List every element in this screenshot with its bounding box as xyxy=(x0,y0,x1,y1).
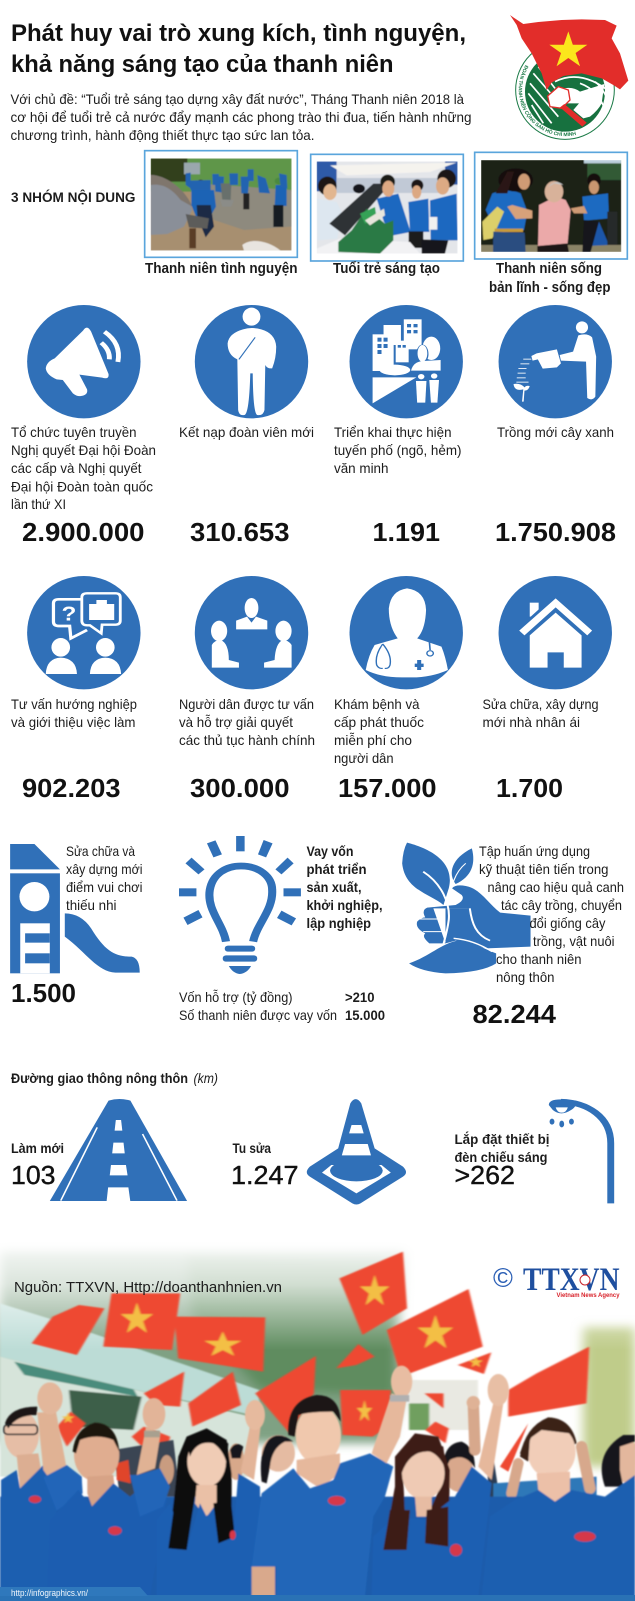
text: loans: Vay vốn xyxy=(306,843,354,859)
table: loan figures xyxy=(179,989,385,1023)
heading: rural roads: (km) xyxy=(194,1071,218,1086)
number: 1.750.908 xyxy=(495,517,616,547)
icon: watering a plant xyxy=(499,305,612,418)
back row and shade xyxy=(113,1440,180,1497)
icon: counselling chat: ? xyxy=(62,603,76,625)
number: 902.203 xyxy=(22,773,120,803)
stat: civilised streets xyxy=(334,305,463,547)
text: training: trồng, vật nuôi xyxy=(533,933,614,949)
text: new members: Kết nạp đoàn viên mới xyxy=(179,424,314,440)
number: 310.653 xyxy=(190,517,290,547)
text: loans: phát triển xyxy=(306,861,366,877)
table: loan figures: Số thanh niên được vay vốn xyxy=(179,1007,337,1023)
woman right xyxy=(520,1417,577,1460)
number: 300.000 xyxy=(190,773,290,803)
text: propaganda: Tổ chức tuyên truyền xyxy=(11,424,136,440)
text: propaganda: các cấp và Nghị quyết xyxy=(11,460,142,476)
caption: living boldly and beautifully: Thanh niên sống xyxy=(496,261,602,277)
text: loans xyxy=(306,843,382,931)
man centre left xyxy=(72,1435,120,1480)
text: streets: tuyến phố (ngõ, hẻm) xyxy=(334,442,462,458)
stat: repaired roads xyxy=(231,1099,406,1204)
stat: street lighting xyxy=(454,1099,611,1203)
woman with long hair xyxy=(168,1428,235,1550)
source text: Nguồn: TTXVN, Http://doanthanhnien.vn xyxy=(14,1279,282,1296)
label xyxy=(454,1130,550,1165)
man centre xyxy=(294,1410,342,1460)
photo: youth volunteers xyxy=(145,151,297,257)
icon: counselling chat xyxy=(27,576,141,689)
icon: meeting people xyxy=(195,576,308,689)
title xyxy=(11,20,466,78)
text: propaganda: Đại hội Đoàn toàn quốc xyxy=(11,478,153,494)
number: 103 xyxy=(11,1160,56,1190)
man with glasses xyxy=(4,1412,39,1458)
text: loans: khởi nghiệp, xyxy=(306,897,382,913)
text: playgrounds xyxy=(66,843,142,913)
text: counselling xyxy=(11,696,137,730)
icon: hand and seedling xyxy=(402,843,531,973)
text: counselling: Tư vấn hướng nghiệp xyxy=(11,696,137,712)
icon: road xyxy=(50,1099,187,1202)
icon: street lamp xyxy=(549,1099,611,1203)
label: Làm mới xyxy=(11,1140,64,1156)
text: medical care: người dân xyxy=(334,750,394,766)
table: loan figures: >210 xyxy=(345,989,375,1005)
text: propaganda: lần thứ XI xyxy=(11,496,66,512)
caption: living boldly and beautifully: bản lĩnh - sống đẹp xyxy=(489,280,611,296)
text: propaganda xyxy=(11,424,156,512)
number: >262 xyxy=(454,1160,515,1190)
caption: youth volunteers: Thanh niên tình nguyện xyxy=(145,261,298,277)
photo: youth waving flags xyxy=(0,1230,635,1601)
background raised hands xyxy=(473,1403,590,1493)
crowd of youth in blue shirts xyxy=(0,1366,635,1597)
text: training: tác cây trồng, chuyển xyxy=(501,897,622,913)
table: loan figures: Vốn hỗ trợ (tỷ đồng) xyxy=(179,989,292,1005)
stat: career counselling xyxy=(11,576,141,803)
stat: free medical care xyxy=(334,576,463,803)
heading: rural roads: Đường giao thông nông thôn xyxy=(11,1070,188,1086)
number: 1.700 xyxy=(496,773,563,803)
stat: resolutions propaganda xyxy=(11,305,156,547)
label: 3 content groups: 3 NHÓM NỘI DUNG xyxy=(11,190,136,205)
icon: youth union logo xyxy=(510,15,628,140)
icon: traffic cone xyxy=(307,1099,406,1204)
icon: doctor xyxy=(350,576,463,689)
text: training: Tập huấn ứng dụng xyxy=(479,843,590,859)
text: houses: mới nhà nhân ái xyxy=(482,714,580,730)
text: playgrounds: xây dựng mới xyxy=(66,861,142,877)
label: Tu sửa xyxy=(232,1140,271,1156)
number: 82.244 xyxy=(472,999,557,1029)
caption: living boldly and beautifully xyxy=(489,261,611,296)
text: streets: Triển khai thực hiện xyxy=(334,424,452,440)
logo: TTXVN news agency: Vietnam News Agency xyxy=(556,1292,620,1299)
icon: youth union logo: ĐOÀN THANH NIÊN CỘNG SẢN HỒ CHÍ MINH xyxy=(518,65,576,136)
label: đèn chiếu sáng xyxy=(454,1149,548,1165)
stat: children's playgrounds xyxy=(10,843,142,1008)
intro text xyxy=(10,91,472,143)
top fade xyxy=(0,1243,635,1345)
stat: new union members xyxy=(179,305,314,547)
logo: TTXVN news agency: © xyxy=(493,1263,513,1293)
base shirts xyxy=(0,1496,522,1595)
label: Lắp đặt thiết bị xyxy=(454,1130,550,1147)
text: playgrounds: Sửa chữa và xyxy=(66,843,135,859)
text: playgrounds: thiếu nhi xyxy=(66,897,116,913)
text: streets: văn minh xyxy=(334,460,388,476)
text: training: kỹ thuật tiên tiến trong xyxy=(479,861,608,877)
footer bar: http://infographics.vn/ xyxy=(11,1588,88,1599)
stat: charity houses xyxy=(482,576,612,803)
number: 1.500 xyxy=(11,978,76,1008)
number: 1.247 xyxy=(231,1160,298,1190)
text: playgrounds: điểm vui chơi xyxy=(66,879,142,895)
stat: youth loans xyxy=(179,836,385,1023)
text: medical care: miễn phí cho xyxy=(334,732,412,748)
text: medical care xyxy=(334,696,424,766)
woman with auburn hair xyxy=(390,1432,451,1512)
text: training: nâng cao hiệu quả canh xyxy=(488,879,624,895)
icon: light bulb xyxy=(179,836,301,974)
logo: TTXVN news agency xyxy=(493,1262,620,1299)
icon: megaphone xyxy=(27,305,141,418)
photo: creative youth xyxy=(311,154,463,261)
text: admin support: các thủ tục hành chính xyxy=(179,732,315,748)
text: medical care: cấp phát thuốc xyxy=(334,714,424,730)
number: 157.000 xyxy=(338,773,436,803)
number: 2.900.000 xyxy=(22,517,144,547)
text: trees: Trồng mới cây xanh xyxy=(497,424,614,440)
stat: administrative support xyxy=(179,576,315,803)
text: admin support: và hỗ trợ giải quyết xyxy=(179,714,293,730)
intro text: cơ hội để tuổi trẻ cả nước đẩy mạnh các phong trào thi đua, tiến hành những xyxy=(10,109,472,125)
icon: playground slide xyxy=(10,844,140,973)
text: training: cho thanh niên xyxy=(496,951,582,967)
icon: person xyxy=(195,305,308,418)
text: training: đổi giống cây xyxy=(530,915,606,931)
text: training xyxy=(479,843,624,985)
number: 1.191 xyxy=(372,517,440,547)
badges xyxy=(29,1496,596,1556)
stat: farm technology training xyxy=(402,843,624,1029)
text: houses: Sửa chữa, xây dựng xyxy=(482,696,598,712)
footer bar xyxy=(0,1587,635,1601)
text: houses xyxy=(482,696,598,730)
stat: tree planting xyxy=(495,305,616,547)
text: loans: lập nghiệp xyxy=(306,915,371,931)
text: medical care: Khám bệnh và xyxy=(334,696,420,712)
intro text: Với chủ đề: “Tuổi trẻ sáng tạo dựng xây đất nước”, Tháng Thanh niên 2018 là xyxy=(10,91,464,107)
text: streets xyxy=(334,424,462,476)
icon: house xyxy=(499,576,612,689)
text: counselling: và giới thiệu việc làm xyxy=(11,714,136,730)
caption: creative youth: Tuổi trẻ sáng tạo xyxy=(333,261,440,277)
intro text: chương trình, hành động thiết thực tạo sức lan tỏa. xyxy=(10,127,314,143)
title: Phát huy vai trò xung kích, tình nguyện, xyxy=(11,20,466,47)
text: propaganda: Nghị quyết Đại hội Đoàn xyxy=(11,442,156,458)
text: loans: sản xuất, xyxy=(306,879,362,895)
title: khả năng sáng tạo của thanh niên xyxy=(11,51,394,78)
icon: city and people xyxy=(350,305,463,418)
stat: new roads xyxy=(11,1099,187,1202)
text: admin support xyxy=(179,696,315,748)
text: training: nông thôn xyxy=(496,969,554,985)
table: loan figures: 15.000 xyxy=(345,1007,385,1023)
text: admin support: Người dân được tư vấn xyxy=(179,696,314,712)
photo: living boldly and beautifully xyxy=(475,152,627,259)
